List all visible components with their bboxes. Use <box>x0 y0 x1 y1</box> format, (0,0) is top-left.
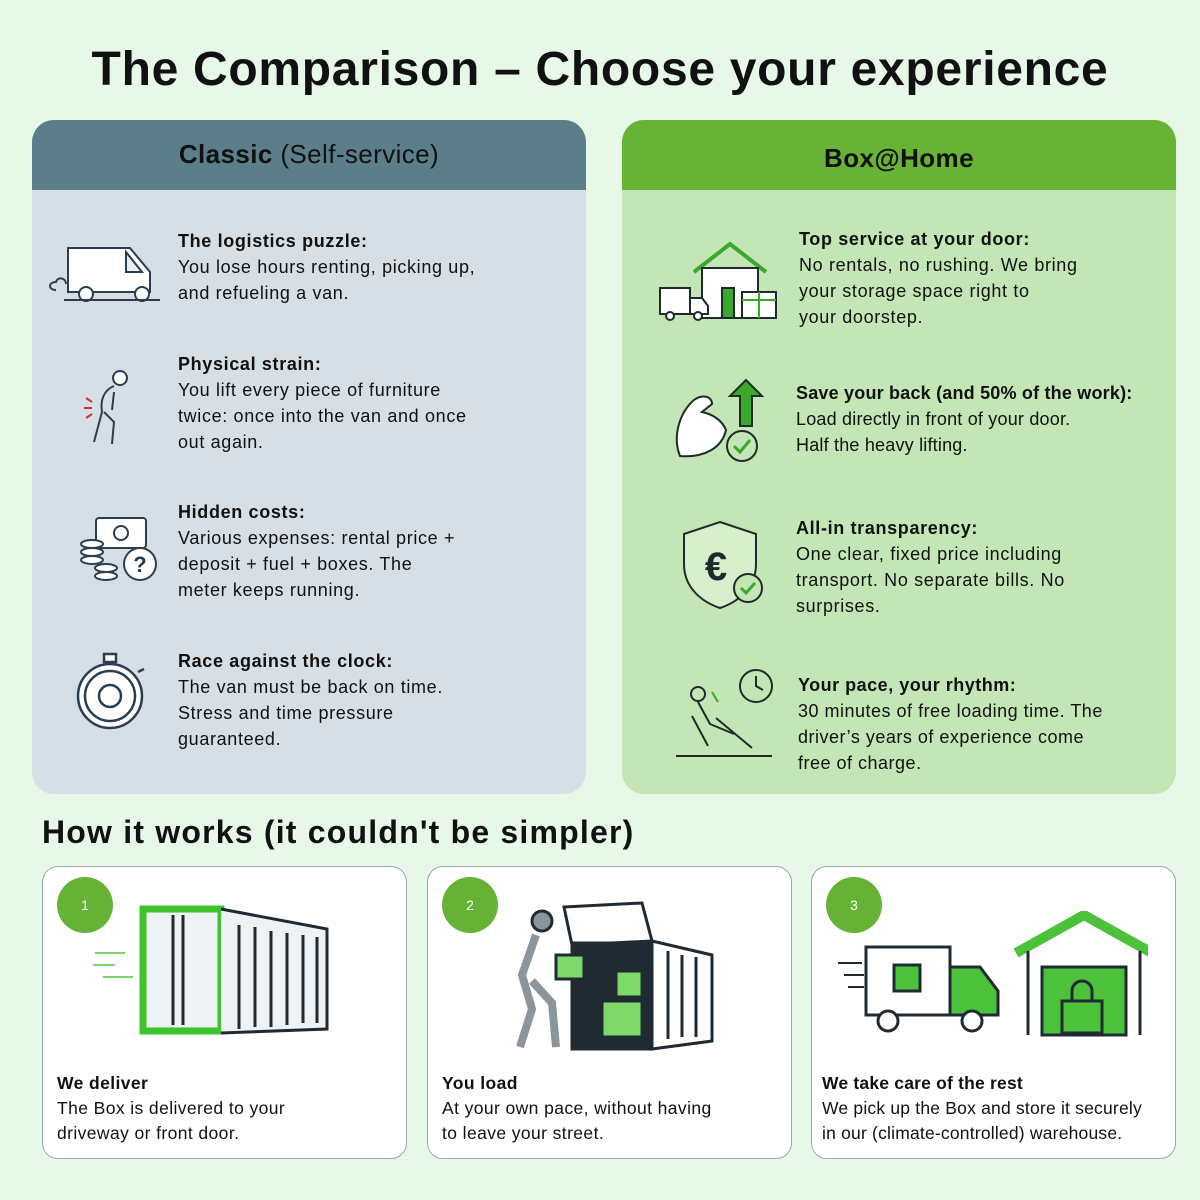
text: save your back: Save your back (and 50% of the work): <box>796 383 1132 403</box>
text: race against clock <box>178 651 443 749</box>
text: we deliver: We deliver <box>57 1073 148 1093</box>
text: save your back: Load directly in front of your door. <box>796 409 1070 429</box>
text: we take care: We pick up the Box and store it securely <box>822 1098 1142 1118</box>
text: top service: Top service at your door: <box>799 229 1030 249</box>
text: race against clock: Stress and time pressure <box>178 703 394 723</box>
number 2 <box>442 877 498 933</box>
text: logistics puzzle: The logistics puzzle: <box>178 231 368 251</box>
text: hidden costs: Hidden costs: <box>178 502 305 522</box>
text: your pace: free of charge. <box>798 753 922 773</box>
icon: money coins question <box>80 517 157 581</box>
icon: van <box>49 247 160 302</box>
text: hidden costs <box>178 502 455 600</box>
text: top service: your storage space right to <box>799 281 1030 301</box>
icon: euro shield <box>683 521 763 609</box>
icon: relaxing person with clock <box>676 669 773 757</box>
panel: classic <box>32 120 586 794</box>
text: your pace <box>798 675 1103 773</box>
number 3 <box>826 877 882 933</box>
text: save your back <box>796 383 1132 455</box>
icon: muscle arrow check <box>676 378 764 462</box>
text: we deliver: driveway or front door. <box>57 1123 239 1143</box>
text: hidden costs: Various expenses: rental price + <box>178 528 455 548</box>
text: logistics puzzle: You lose hours renting, picking up, <box>178 257 475 277</box>
text: we take care <box>822 1073 1142 1143</box>
text: we deliver <box>57 1073 285 1143</box>
text: physical strain: twice: once into the van and once <box>178 406 467 426</box>
classic header: Classic (Self-service) <box>179 139 439 169</box>
box@home header <box>622 120 1176 190</box>
number 3: 3 <box>850 897 858 913</box>
box@home header: Box@Home <box>824 143 974 173</box>
text: physical strain <box>178 354 467 452</box>
section heading: How it works (it couldn't be simpler) <box>42 814 634 850</box>
text: race against clock: The van must be back on time. <box>178 677 443 697</box>
icon: container <box>93 906 328 1034</box>
text: hidden costs: deposit + fuel + boxes. The <box>178 554 412 574</box>
text: you load: to leave your street. <box>442 1123 604 1143</box>
text: logistics puzzle: and refueling a van. <box>178 283 349 303</box>
panel: box@home <box>622 120 1176 794</box>
text: all-in transparency: All-in transparency: <box>796 518 978 538</box>
classic header <box>32 120 586 190</box>
text: we deliver: The Box is delivered to your <box>57 1098 285 1118</box>
text: all-in transparency <box>796 518 1065 616</box>
text: physical strain: Physical strain: <box>178 354 321 374</box>
icon: person loading container <box>516 902 714 1051</box>
text: you load <box>442 1073 712 1143</box>
number 1 <box>57 877 113 933</box>
icon: house truck gift <box>659 242 777 321</box>
icon: euro shield: € <box>705 545 727 589</box>
text: top service <box>799 229 1078 327</box>
title: The Comparison – Choose your experience <box>92 43 1108 96</box>
text: we take care: We take care of the rest <box>822 1073 1023 1093</box>
icon: truck and garage <box>838 911 1148 1036</box>
card: step 2 <box>427 866 792 1159</box>
number 2: 2 <box>466 897 474 913</box>
text: hidden costs: meter keeps running. <box>178 580 360 600</box>
icon: back pain person <box>84 370 128 444</box>
text: you load: At your own pace, without having <box>442 1098 712 1118</box>
icon: money coins question: ? <box>133 552 147 577</box>
text: physical strain: You lift every piece of furniture <box>178 380 441 400</box>
text: all-in transparency: surprises. <box>796 596 881 616</box>
text: top service: No rentals, no rushing. We bring <box>799 255 1078 275</box>
text: you load: You load <box>442 1073 518 1093</box>
text: physical strain: out again. <box>178 432 264 452</box>
text: your pace: driver’s years of experience come <box>798 727 1084 747</box>
icon: stopwatch <box>76 652 144 730</box>
card: step 3 <box>811 866 1176 1159</box>
text: all-in transparency: transport. No separate bills. No <box>796 570 1065 590</box>
text: we take care: in our (climate-controlled) warehouse. <box>822 1123 1122 1143</box>
card: step 1 <box>42 866 407 1159</box>
text: your pace: 30 minutes of free loading time. The <box>798 701 1103 721</box>
text: save your back: Half the heavy lifting. <box>796 435 968 455</box>
text: your pace: Your pace, your rhythm: <box>798 675 1016 695</box>
text: top service: your doorstep. <box>799 307 923 327</box>
text: all-in transparency: One clear, fixed price including <box>796 544 1062 564</box>
number 1: 1 <box>81 897 89 913</box>
text: race against clock: Race against the clock: <box>178 651 393 671</box>
text: race against clock: guaranteed. <box>178 729 281 749</box>
text: logistics puzzle <box>178 231 475 303</box>
